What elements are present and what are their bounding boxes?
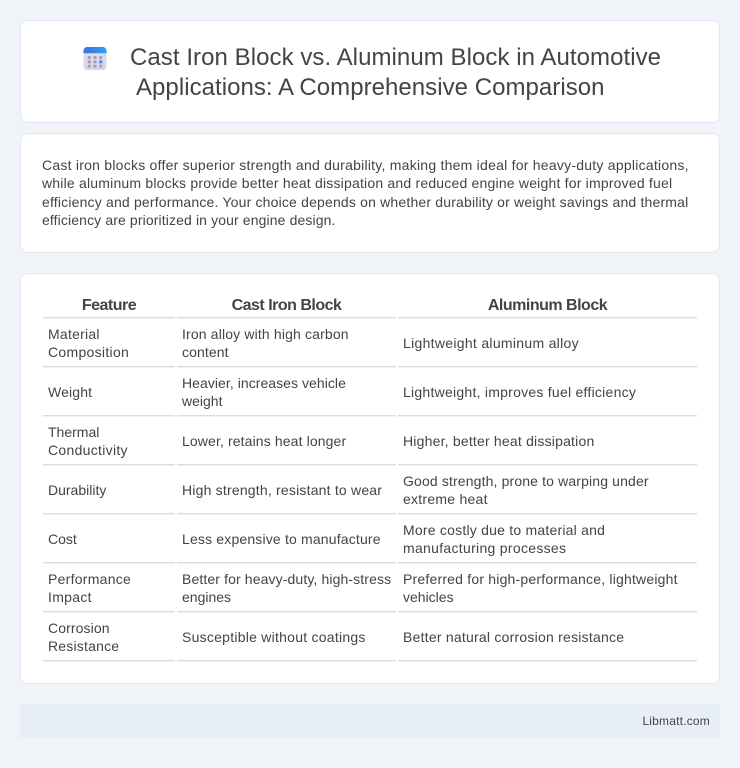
- row: corrosion resistance: [48, 620, 624, 654]
- row: durability: [48, 473, 649, 507]
- row: durability: extreme heat: [403, 491, 488, 507]
- row: thermal conductivity: Conductivity: [48, 442, 128, 458]
- table header: feature: Feature: [82, 297, 136, 314]
- intro text: Cast iron blocks offer superior strength and durability, making them ideal for heavy-duty applications,: [42, 157, 689, 173]
- row: performance impact: [48, 571, 678, 605]
- row: material composition: [48, 326, 579, 360]
- row: performance impact: Preferred for high-performance, lightweight: [403, 571, 678, 587]
- row: performance impact: Better for heavy-duty, high-stress: [182, 571, 391, 587]
- table header: aluminum block: Aluminum Block: [488, 297, 607, 314]
- row: thermal conductivity: Thermal: [48, 424, 99, 440]
- row: material composition: content: [182, 344, 229, 360]
- row: cost: Cost: [48, 531, 77, 547]
- title: [130, 44, 661, 101]
- row: weight: [48, 375, 636, 409]
- row: thermal conductivity: Lower, retains heat longer: [182, 433, 346, 449]
- icon: calendar: [83, 47, 107, 70]
- footer text: Libmatt.com: [642, 714, 710, 728]
- row: thermal conductivity: Higher, better heat dissipation: [403, 433, 594, 449]
- intro text: efficiency are prioritized in your engine design.: [42, 212, 336, 228]
- title: Cast Iron Block vs. Aluminum Block in Automotive: [130, 44, 661, 71]
- row: durability: High strength, resistant to wear: [182, 482, 382, 498]
- row: weight: weight: [182, 393, 222, 409]
- row: weight: Weight: [48, 384, 92, 400]
- intro text: [42, 157, 689, 228]
- intro text: efficiency and performance. Your choice depends on whether durability or weight savings and thermal: [42, 194, 688, 210]
- row: durability: Good strength, prone to warping under: [403, 473, 649, 489]
- row: material composition: Material: [48, 326, 100, 342]
- row: performance impact: Impact: [48, 589, 92, 605]
- row: durability: Durability: [48, 482, 106, 498]
- table header: cast iron block: Cast Iron Block: [232, 297, 341, 314]
- row: performance impact: vehicles: [403, 589, 454, 605]
- row: corrosion resistance: Resistance: [48, 638, 119, 654]
- row: corrosion resistance: Corrosion: [48, 620, 110, 636]
- row: cost: More costly due to material and: [403, 522, 605, 538]
- row: cost: manufacturing processes: [403, 540, 566, 556]
- row: performance impact: engines: [182, 589, 231, 605]
- row: material composition: Composition: [48, 344, 129, 360]
- row: material composition: Lightweight aluminum alloy: [403, 335, 579, 351]
- row: cost: [48, 522, 605, 556]
- row: thermal conductivity: [48, 424, 594, 458]
- title card: [20, 20, 720, 123]
- intro text: while aluminum blocks provide better heat dissipation and reduced engine weight for improved fuel: [42, 175, 672, 191]
- row: corrosion resistance: Susceptible without coatings: [182, 629, 366, 645]
- title: Applications: A Comprehensive Comparison: [136, 74, 605, 101]
- comparison table card: [20, 273, 720, 684]
- row: corrosion resistance: Better natural corrosion resistance: [403, 629, 624, 645]
- row: weight: Heavier, increases vehicle: [182, 375, 346, 391]
- row: material composition: Iron alloy with high carbon: [182, 326, 349, 342]
- row: performance impact: Performance: [48, 571, 131, 587]
- intro card: [20, 133, 720, 253]
- row: cost: Less expensive to manufacture: [182, 531, 381, 547]
- row: weight: Lightweight, improves fuel efficiency: [403, 384, 636, 400]
- footer bar: [20, 704, 720, 738]
